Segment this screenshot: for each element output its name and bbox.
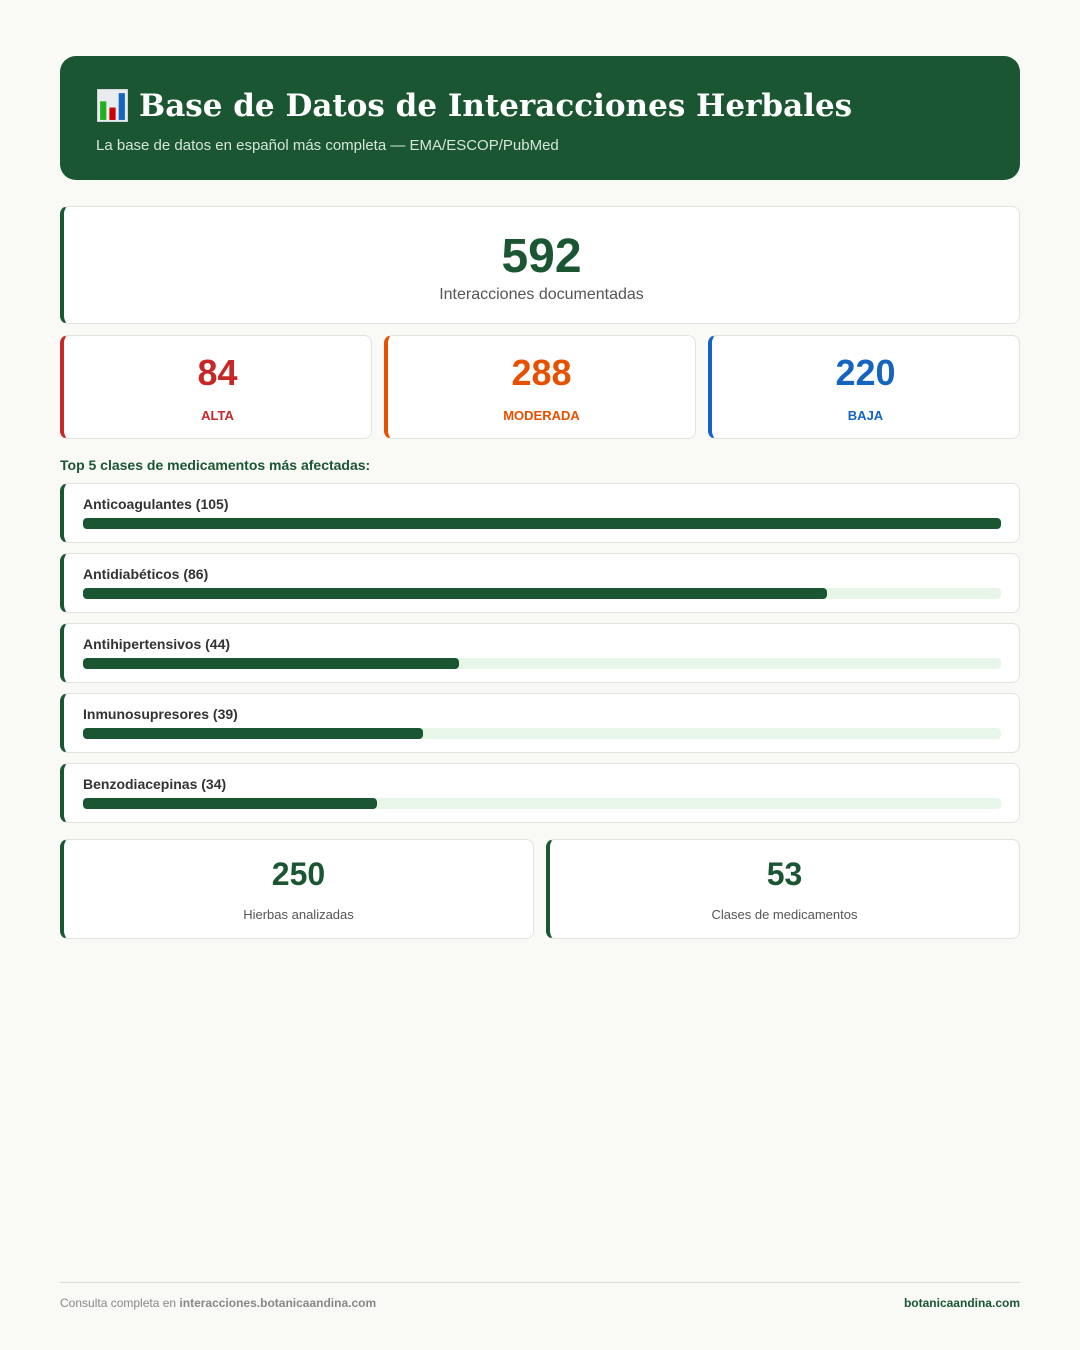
section heading: Top 5 clases de medicamentos más afectadas: [60,457,370,473]
footer right: botanicaandina.com [904,1296,1020,1310]
stat: total [60,206,1020,324]
stat: total: Interacciones documentadas [439,286,644,303]
bar: anticoagulantes [60,483,1020,543]
footer left: Consulta completa en interacciones.botanicaandina.com [60,1296,376,1310]
stat: moderada: MODERADA [503,408,580,423]
bar: inmunosupresores: Inmunosupresores (39) [83,706,238,722]
bar: anticoagulantes: Anticoagulantes (105) [83,496,228,512]
bar: benzodiacepinas: Benzodiacepinas (34) [83,776,226,792]
stat: moderada: 288 [511,352,572,393]
header [60,56,1020,180]
stat: hierbas: 250 [272,856,325,892]
stat: total: 592 [501,230,582,283]
stat: baja: 220 [835,352,896,393]
bar: antihipertensivos: Antihipertensivos (44) [83,636,230,652]
stat: baja [708,335,1020,439]
bar: antihipertensivos [60,623,1020,683]
stat: alta: 84 [197,352,238,393]
bar: antidiabeticos: Antidiabéticos (86) [83,566,208,582]
stat: hierbas [60,839,534,939]
stat: clases: 53 [767,856,802,892]
stat: clases [546,839,1020,939]
stat: baja: BAJA [848,408,883,423]
bar: antidiabeticos [60,553,1020,613]
title: Base de Datos de Interacciones Herbales [139,88,852,124]
icon: bar chart [97,89,128,122]
bar: inmunosupresores [60,693,1020,753]
subtitle: La base de datos en español más completa — EMA/ESCOP/PubMed [96,137,559,154]
stat: alta: ALTA [201,408,234,423]
stat: moderada [384,335,696,439]
stat: alta [60,335,372,439]
bar: benzodiacepinas [60,763,1020,823]
stat: hierbas: Hierbas analizadas [243,907,354,922]
stat: clases: Clases de medicamentos [712,907,857,922]
